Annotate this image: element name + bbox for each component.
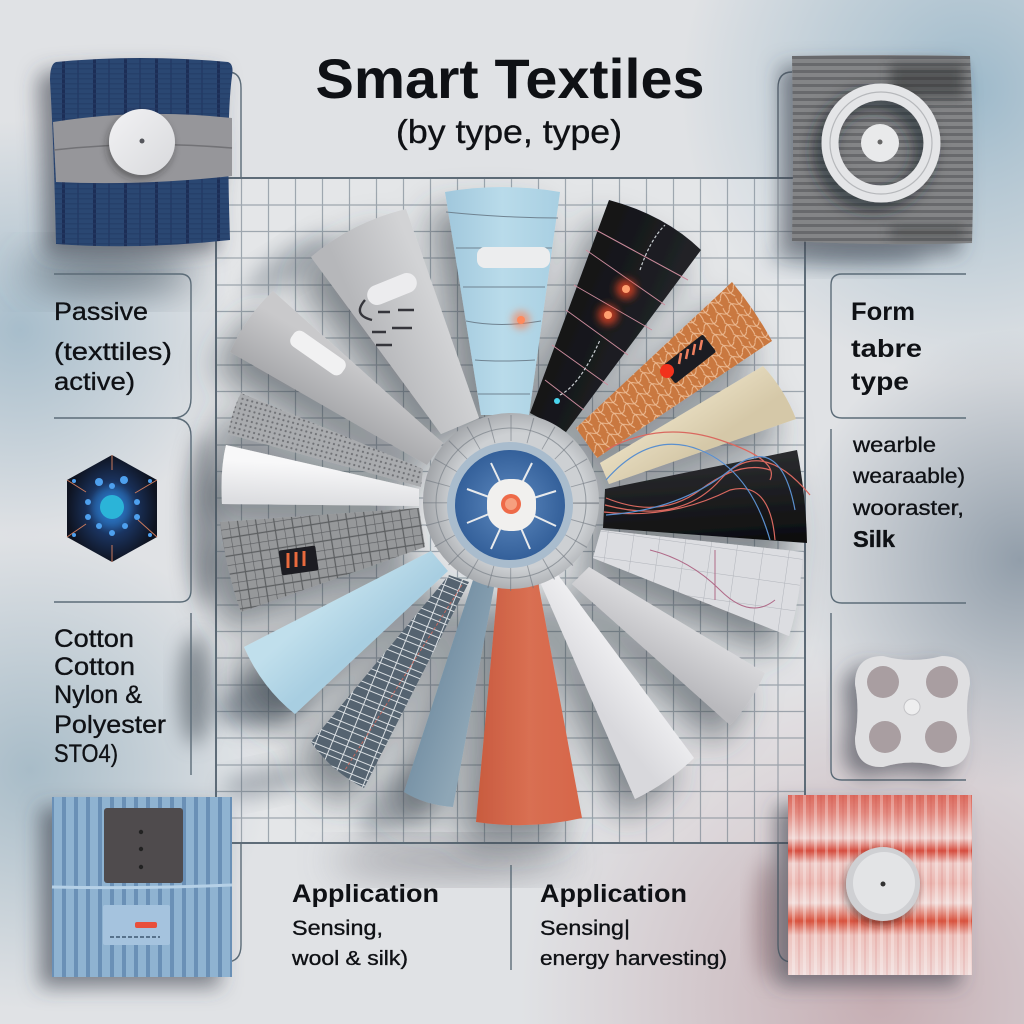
hub spokes [467, 463, 556, 549]
text: form fabric type: tabre [851, 335, 922, 363]
text: passive: active) [54, 368, 135, 396]
cone: dark plaid [311, 575, 469, 788]
grid panel [216, 178, 805, 843]
cone: grey knit with label [311, 209, 479, 434]
panel frame lines [54, 72, 966, 970]
text: application left: Application [292, 880, 439, 908]
cone: white grid with stitching [593, 530, 803, 636]
fan chart of textile cones [220, 187, 810, 825]
title: (by type, type) [396, 113, 622, 150]
text: form fabric type: type [851, 368, 909, 396]
text: application left [291, 880, 439, 970]
icon: hexagon circuit [67, 455, 157, 562]
icon: white quatrefoil clip [855, 656, 970, 767]
text: wearable list: wooraster, [852, 497, 964, 520]
text: application right: Application [540, 880, 687, 908]
text: application left: Sensing, [292, 917, 383, 940]
text: wearable list: wearaable) [852, 465, 965, 488]
grid cast shadows [211, 225, 452, 849]
cone: orange leather with chip [576, 282, 772, 458]
icon: navy knit band with sensor [50, 58, 232, 246]
text: cotton list: STO4) [54, 740, 118, 768]
icon: grey fabric with ring sensor [792, 55, 973, 244]
text: application left: wool & silk) [291, 948, 408, 970]
text: form fabric type [851, 298, 922, 396]
cone: soft grey [572, 567, 765, 725]
title [316, 47, 704, 150]
text: application right: Sensing| [540, 917, 630, 940]
title: Smart Textiles [316, 47, 704, 110]
cone: white [541, 575, 694, 799]
cone: slate blue [404, 580, 495, 807]
hub sensor [487, 479, 536, 531]
cone: grey mesh [228, 393, 423, 487]
cone: coral red [476, 582, 582, 825]
text: cotton list [54, 625, 166, 768]
cone: light blue with LED [445, 187, 560, 415]
cone: grey knit with tag [230, 291, 443, 465]
text: cotton list: Cotton [54, 625, 134, 653]
text: passive: Passive [54, 298, 148, 326]
text: cotton list: Polyester [54, 711, 166, 739]
text: application right: energy harvesting) [540, 948, 727, 970]
cone: black with LEDs [530, 200, 701, 432]
text: application right [540, 880, 727, 970]
text: cotton list: Nylon & [54, 681, 142, 709]
cone: black with wires [603, 432, 810, 543]
central hub [423, 413, 599, 589]
text: form fabric type: Form [851, 298, 915, 326]
text: wearable list: wearble [852, 434, 936, 457]
cone: beige with wires [600, 366, 796, 484]
text: passive: (texttiles) [54, 338, 172, 366]
text: passive [54, 298, 172, 396]
cone: grey grid with chip [220, 508, 425, 612]
text: wearable list: Silk [853, 526, 895, 552]
cone: white smooth [222, 445, 419, 506]
text: cotton list: Cotton [54, 653, 135, 681]
text: wearable list [852, 434, 965, 552]
icon: blue knit with modules [52, 797, 232, 977]
icon: red fuzzy knit with sensor [788, 795, 972, 975]
cone: pale blue [244, 551, 448, 714]
